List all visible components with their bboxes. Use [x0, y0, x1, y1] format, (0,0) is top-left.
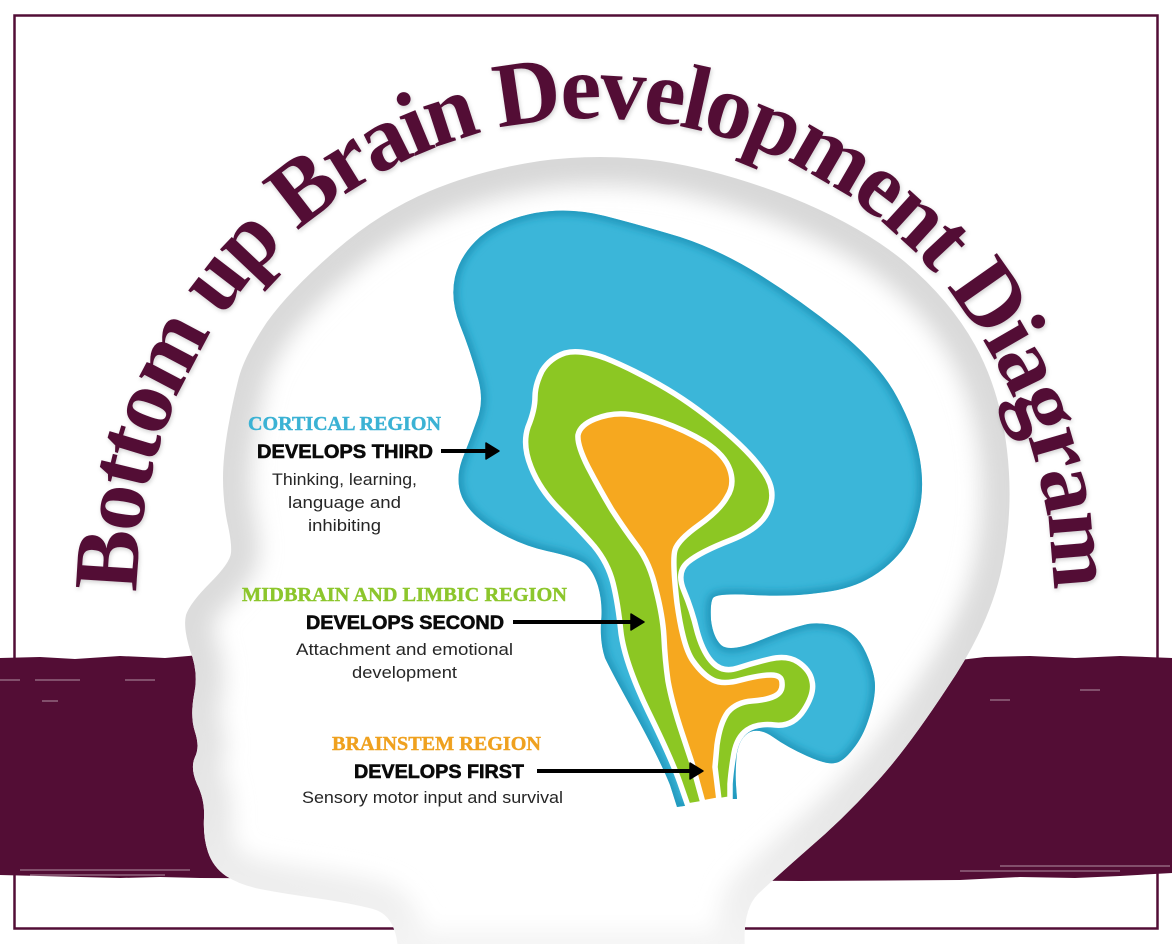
head silhouette [185, 157, 1010, 944]
label: cortical region: Thinking, learning, [272, 470, 417, 489]
label: midbrain and limbic region: DEVELOPS SECOND [306, 613, 504, 634]
brush stroke band [0, 655, 1172, 881]
label: cortical region: DEVELOPS THIRD [257, 442, 433, 463]
label: midbrain and limbic region [242, 584, 568, 682]
arrow: midbrain region [513, 614, 644, 630]
brainstem region (orange) [578, 414, 782, 803]
cortical region (blue) [453, 211, 922, 807]
label: brainstem region: Sensory motor input and survival [302, 788, 563, 807]
label: midbrain and limbic region: Attachment and emotional [296, 640, 513, 659]
label: midbrain and limbic region: MIDBRAIN AND LIMBIC REGION [242, 584, 568, 606]
arrow: brainstem region [537, 763, 703, 779]
label: cortical region: CORTICAL REGION [248, 413, 442, 435]
label: brainstem region: BRAINSTEM REGION [332, 733, 542, 755]
midbrain and limbic region (green) [526, 352, 813, 806]
label: brainstem region: DEVELOPS FIRST [354, 762, 524, 783]
label: midbrain and limbic region: development [352, 663, 457, 682]
label: cortical region: language and [288, 493, 401, 512]
label: cortical region: inhibiting [308, 516, 381, 535]
arrow: cortical region [441, 443, 499, 459]
title: Bottom up Brain Development Diagram: Bottom up Brain Development Diagram [76, 62, 1099, 594]
label: cortical region [248, 413, 442, 535]
label: brainstem region [302, 733, 563, 807]
brain illustration [453, 211, 922, 807]
